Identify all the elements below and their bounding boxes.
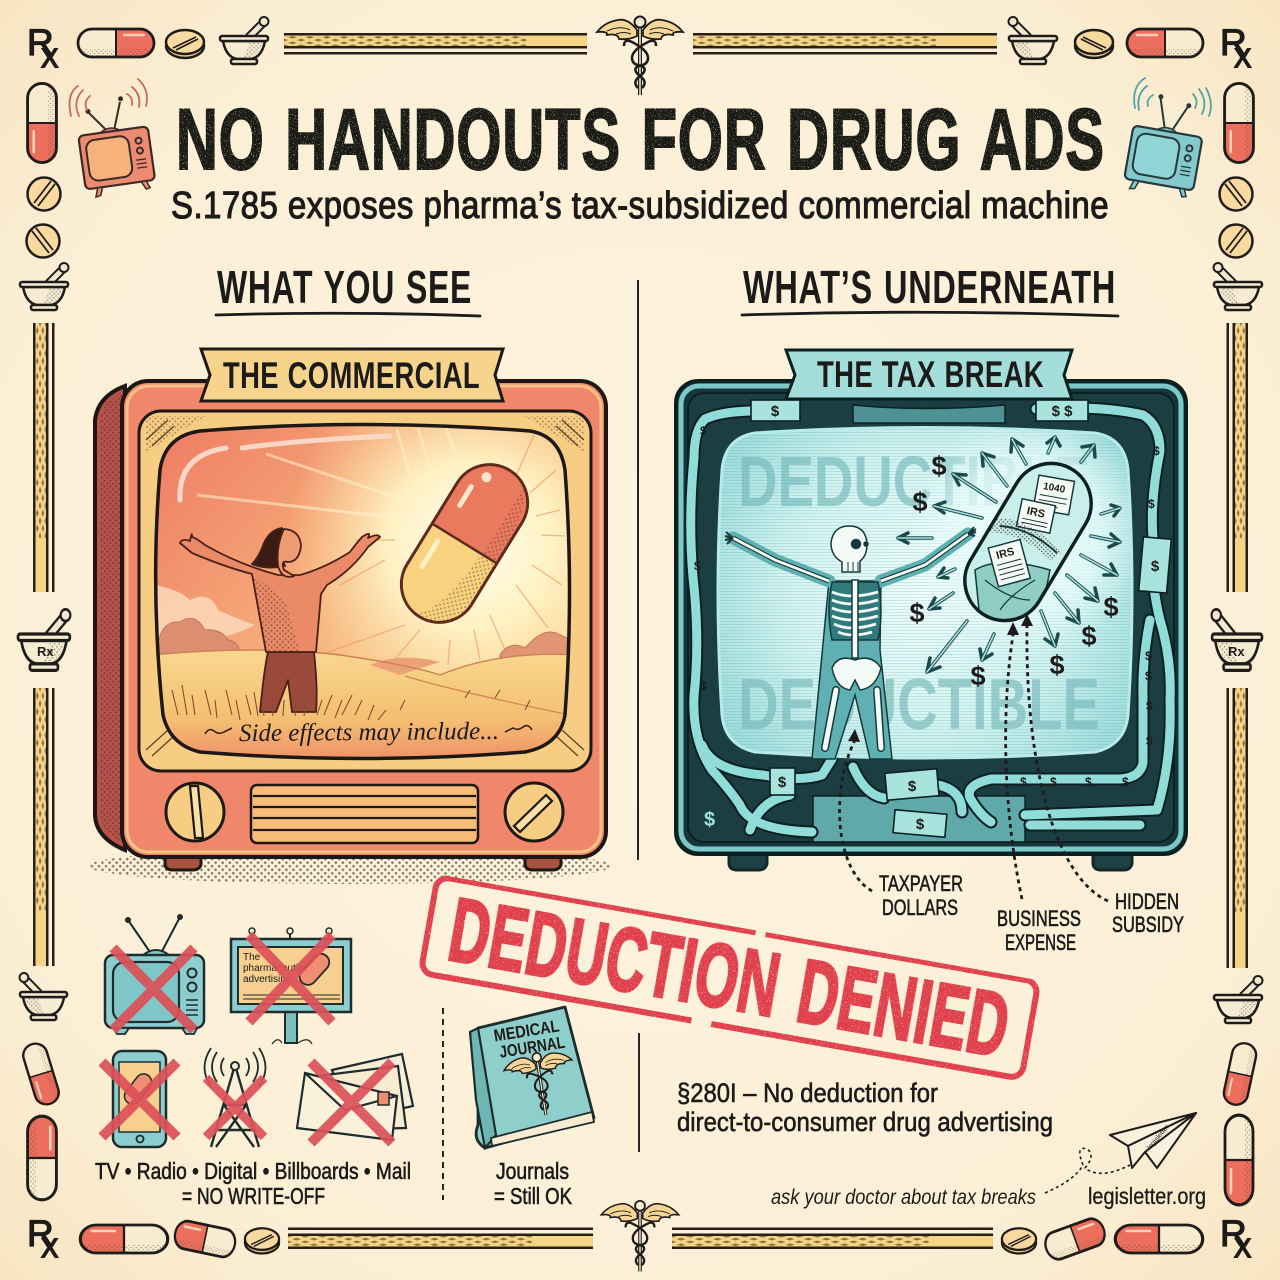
heading: what you see: WHAT YOU SEE [217,261,472,313]
label: hidden subsidy: SUBSIDY [1112,912,1184,937]
bills [751,400,1171,837]
dollar signs: $ [909,598,925,628]
Rx top right [1220,22,1253,75]
circuit dollar marks: $ [1146,734,1153,748]
bottom plate [813,796,1025,842]
icon: crossed phone [102,1051,177,1147]
Rx bottom left: R [27,1213,54,1254]
Rx bottom right: X [1233,1233,1253,1265]
circuit dollar marks [694,424,1160,831]
text: section 280I [677,1078,1053,1137]
icon: crossed TV [105,914,204,1034]
dollar signs: $ [931,451,947,481]
dollar signs: $ [1081,621,1097,651]
Rx bottom left [27,1213,60,1265]
panel: the commercial TV [88,349,612,884]
ghost word bottom: DEDUCTIBLE [738,665,1100,745]
label: hidden subsidy: HIDDEN [1115,889,1179,914]
text: section 280I: direct-to-consumer drug advertising [677,1107,1053,1137]
circuit dollar marks: $ [1122,775,1129,789]
Rx top right: R [1220,22,1247,63]
dollar signs [909,451,1119,691]
icon: crossed billboard: pharmaceutical [243,963,311,974]
halftone shadow [88,848,612,884]
icon: retro TV teal [1123,90,1209,200]
circuit dollar marks: $ [1050,775,1057,789]
form IRS lower [988,540,1030,587]
circuit dollar marks: $ [694,559,701,573]
speaker grille [251,785,478,843]
label: hidden subsidy [1112,889,1184,937]
label: taxpayer dollars: DOLLARS [882,895,958,920]
website: legisletter.org [1088,1183,1206,1209]
dashed flight trail [1045,1148,1130,1193]
Rx top left: X [40,43,60,75]
radiating arrows [898,437,1120,672]
caption: journals ok: = Still OK [494,1183,573,1209]
text: section 280I: §280I – No deduction for [677,1078,938,1108]
icon: medical journal [470,1007,594,1148]
money roll [975,562,1050,620]
bill dollar signs: $ $ [1052,403,1073,420]
left border icons [20,83,68,1200]
circuit dollar marks: $ [1085,775,1092,789]
stamp: deduction denied [420,876,1038,1081]
Rx top left [27,22,60,75]
rays [197,425,462,519]
dollar signs: $ [912,487,928,517]
icon: medical journal: MEDICAL [492,1016,561,1045]
mid mortars with Rx: Rx [1228,644,1245,659]
money conduit [691,408,1170,832]
label: business expense: EXPENSE [1005,930,1076,955]
TV side [95,386,125,850]
caption: no write-off [95,1158,411,1209]
clouds [158,586,255,638]
screen outline [156,424,570,758]
icon: paper airplane: legisletter [1146,1123,1171,1151]
banner: the commercial [201,349,503,401]
bill dollar signs [771,403,1160,833]
TV feet [165,856,561,870]
glass glare [180,436,390,500]
circuit dollar marks: $ [1148,497,1155,511]
left knob [166,783,224,841]
glass pill with tax forms [963,462,1093,622]
form 1040: 1040 [1042,481,1066,496]
Rx bottom right: R [1220,1213,1247,1254]
Rx bottom left: X [40,1233,60,1265]
caduceus top [597,16,683,95]
circuit dollar marks: $ [1020,775,1027,789]
icon: crossed radio tower [204,1048,266,1147]
stamp border breaks [691,924,766,1031]
dollar signs: $ [1049,650,1065,680]
bill dollar signs: $ [1151,558,1160,575]
right border icons [1214,83,1262,1205]
caption: no write-off: TV • Radio • Digital • Billboards • Mail [95,1158,411,1184]
screen scene [150,418,580,765]
skeleton [725,526,976,759]
label: taxpayer dollars: TAXPAYER [879,871,963,896]
heading: what's underneath: WHAT’S UNDERNEATH [743,261,1116,313]
banner: the tax break [786,350,1072,399]
fields [160,650,566,757]
mid mortars with Rx: Rx [37,644,54,659]
caption: no write-off: = NO WRITE-OFF [182,1183,325,1209]
circuit dollar marks: $ [1146,699,1153,713]
dollar signs: $ [1103,592,1119,622]
bill dollar signs: $ [916,816,925,833]
icon: retro TV coral [74,93,156,198]
feet [729,852,1132,870]
bill dollar signs: $ [771,403,780,420]
mid mortars with Rx [18,609,1262,670]
caption: journals ok: Journals [496,1158,569,1184]
banner: the tax break: THE TAX BREAK [817,354,1044,395]
bezel [139,411,591,771]
caduceus bottom [601,1201,679,1272]
subtitle: S.1785 exposes pharma’s tax-subsidized commercial machine [171,185,1109,227]
signal waves left [70,79,147,116]
dollar signs: $ [970,661,986,691]
circuit dollar marks: $ [1153,444,1160,458]
label: business expense: BUSINESS [997,906,1081,931]
bottom border icons [80,1215,1203,1263]
bill dollar signs: $ [778,774,787,791]
arrowheads [848,614,1033,742]
icon: crossed billboard: The [243,952,261,963]
form IRS lower: IRS [995,546,1016,562]
form IRS [1016,499,1056,533]
signal waves right [1134,78,1211,116]
person [180,528,380,712]
top border icons [78,17,1203,64]
circuit dollar marks: $ [700,679,707,693]
caption: side effects: Side effects may include... [239,718,499,747]
TV body [122,381,606,857]
icon: paper airplane [1110,1113,1196,1168]
form 1040 [1033,475,1075,515]
ghost word top: DEDUCTIBLE [738,443,1090,522]
Rx bottom right [1220,1213,1253,1265]
form IRS: IRS [1026,505,1046,521]
right knob [505,783,563,841]
body [676,381,1186,854]
icon: crossed mail [297,1054,413,1143]
pill glow [921,430,1130,637]
Rx top left: R [27,22,54,63]
tagline: ask your doctor about tax breaks [771,1186,1036,1209]
circuit dollar marks: $ [700,424,707,438]
bill dollar signs: $ [908,778,917,795]
x-ray screen [720,429,1130,756]
divider halftone [990,518,1061,560]
icon: crossed billboard [231,928,351,1044]
caption: journals ok [494,1158,573,1209]
grass in front [172,685,530,720]
icon: crossed billboard: advertising [243,974,291,985]
circuit dollar marks: $ [1145,649,1152,663]
panel: the tax break X-ray TV [676,350,1186,870]
icon: medical journal: JOURNAL [498,1033,566,1062]
callout arrows [840,625,1108,901]
top vent [853,405,1005,423]
center divider [638,280,639,1152]
label: business expense [997,906,1081,955]
label: taxpayer dollars [879,871,963,920]
circuit dollar marks: $ [1145,669,1152,683]
floating pill [387,450,542,637]
circuit dollar marks: $ [704,809,715,831]
Rx top right: X [1233,43,1253,75]
heading: what's underneath [742,261,1118,316]
banner: the commercial: THE COMMERCIAL [223,355,480,396]
dashed divider [442,1008,444,1200]
